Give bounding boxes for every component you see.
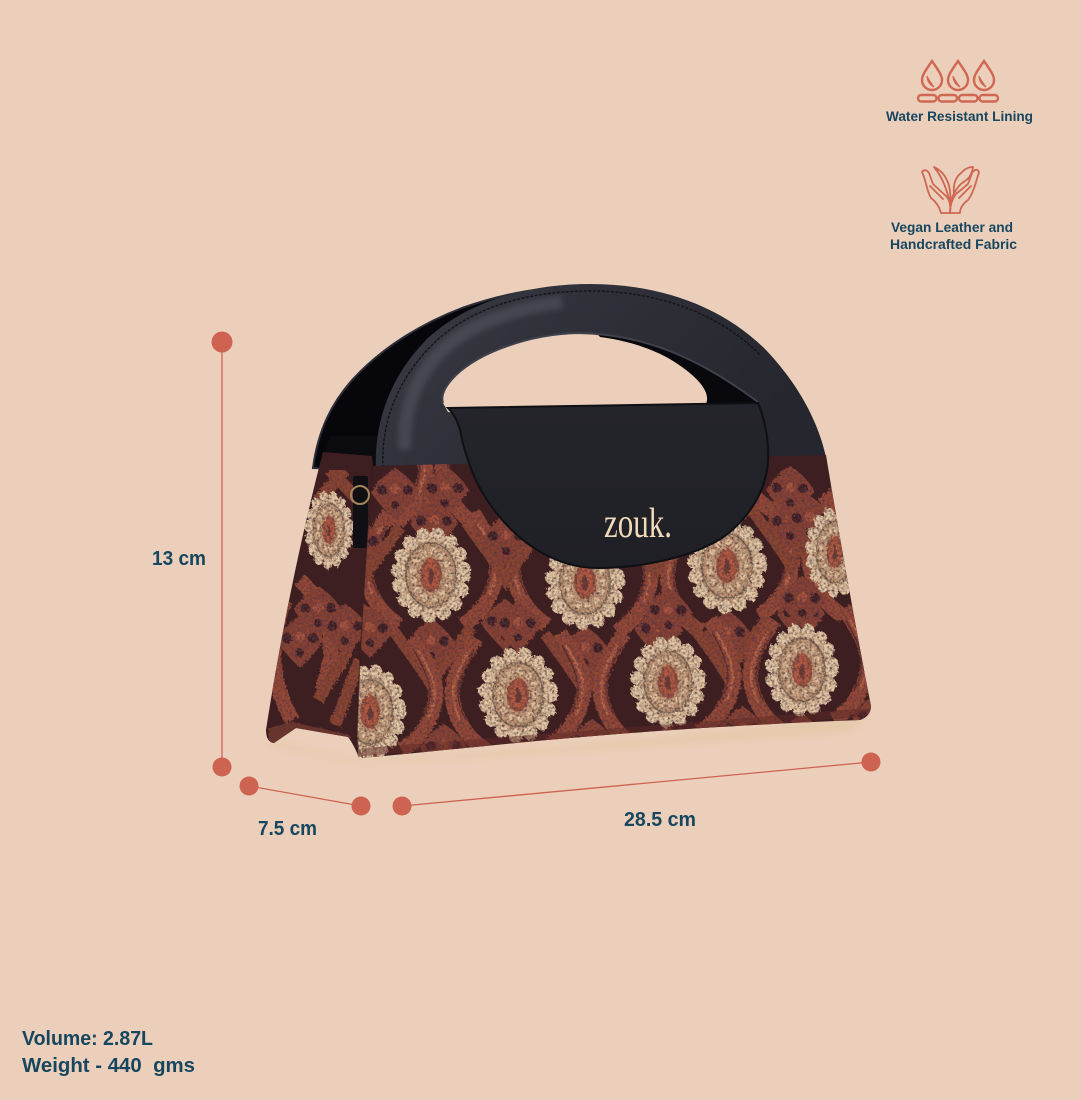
volume and weight text: Volume: 2.87L (22, 1028, 153, 1050)
volume and weight text (22, 1028, 195, 1077)
height label: 13 cm (152, 548, 206, 570)
fabric side panel (266, 452, 373, 758)
volume and weight text: Weight - 440 gms (22, 1055, 195, 1077)
fabric front panel (357, 455, 871, 758)
logo: zouk. (604, 501, 672, 547)
vegan leather label: Handcrafted Fabric (890, 237, 1018, 252)
icon: water drops (918, 61, 998, 102)
depth dimension (240, 776, 370, 840)
floor shadow (270, 714, 870, 764)
depth label: 7.5 cm (258, 818, 317, 840)
vegan leather label (890, 220, 1018, 252)
width label: 28.5 cm (624, 809, 696, 831)
water resistant label: Water Resistant Lining (886, 109, 1033, 124)
back handle (313, 286, 590, 470)
front flap (448, 403, 768, 568)
icon: hands holding leaf (922, 167, 979, 213)
fold line between side and front (357, 466, 373, 757)
strap loop and ring (351, 476, 369, 548)
width dimension (392, 752, 880, 831)
gusset shadow inside bag (322, 436, 385, 468)
handbag (243, 284, 918, 810)
vegan leather label: Vegan Leather and (891, 220, 1013, 235)
height dimension (152, 332, 232, 776)
front handle (376, 284, 827, 470)
